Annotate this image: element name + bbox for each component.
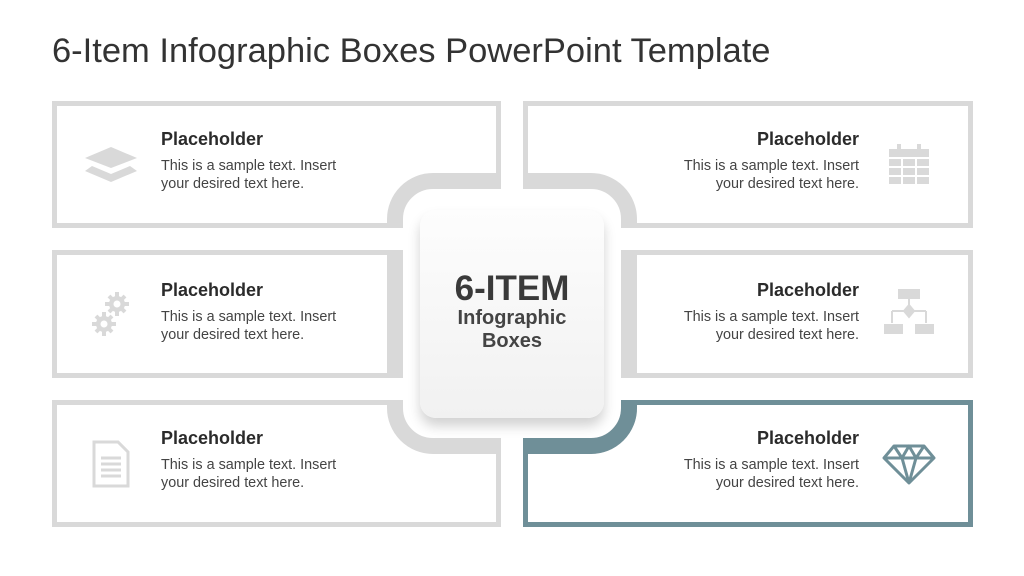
title: 6-Item Infographic Boxes PowerPoint Template: [52, 32, 770, 70]
panel: box 2: [523, 101, 973, 228]
icon: calendar: [889, 144, 929, 184]
text 3: Placeholder: [161, 280, 263, 300]
text 6: [684, 428, 859, 491]
panel: box 1: [52, 101, 501, 228]
text 6: Placeholder: [757, 428, 859, 448]
text 3: your desired text here.: [161, 327, 304, 343]
center card: Infographic: [458, 307, 566, 329]
text 2: [684, 129, 859, 192]
center card: Boxes: [482, 330, 542, 352]
text 2: This is a sample text. Insert: [684, 158, 859, 174]
panel: box 4: [622, 250, 973, 378]
text 4: This is a sample text. Insert: [684, 309, 859, 325]
text 5: This is a sample text. Insert: [161, 457, 336, 473]
connector ring: [387, 173, 637, 454]
text 3: This is a sample text. Insert: [161, 309, 336, 325]
text 4: Placeholder: [757, 280, 859, 300]
center card: [420, 210, 604, 418]
text 1: your desired text here.: [161, 176, 304, 192]
text 4: your desired text here.: [716, 327, 859, 343]
icon: diamond: [882, 444, 936, 485]
text 3: [161, 280, 336, 343]
text 4: [684, 280, 859, 343]
text 5: your desired text here.: [161, 475, 304, 491]
center card: 6-ITEM: [455, 269, 569, 308]
panel: box 3: [52, 250, 402, 378]
text 6: your desired text here.: [716, 475, 859, 491]
text 5: [161, 428, 336, 491]
text 1: This is a sample text. Insert: [161, 158, 336, 174]
text 2: your desired text here.: [716, 176, 859, 192]
text 6: This is a sample text. Insert: [684, 457, 859, 473]
text 1: Placeholder: [161, 129, 263, 149]
text 5: Placeholder: [161, 428, 263, 448]
panel: box 6: [523, 400, 973, 527]
icon: layers: [85, 147, 137, 182]
icon: gears: [92, 292, 129, 336]
icon: document: [92, 440, 130, 488]
text 2: Placeholder: [757, 129, 859, 149]
text 1: [161, 129, 336, 192]
icon: flowchart: [884, 289, 934, 334]
panel: box 5: [52, 400, 501, 527]
